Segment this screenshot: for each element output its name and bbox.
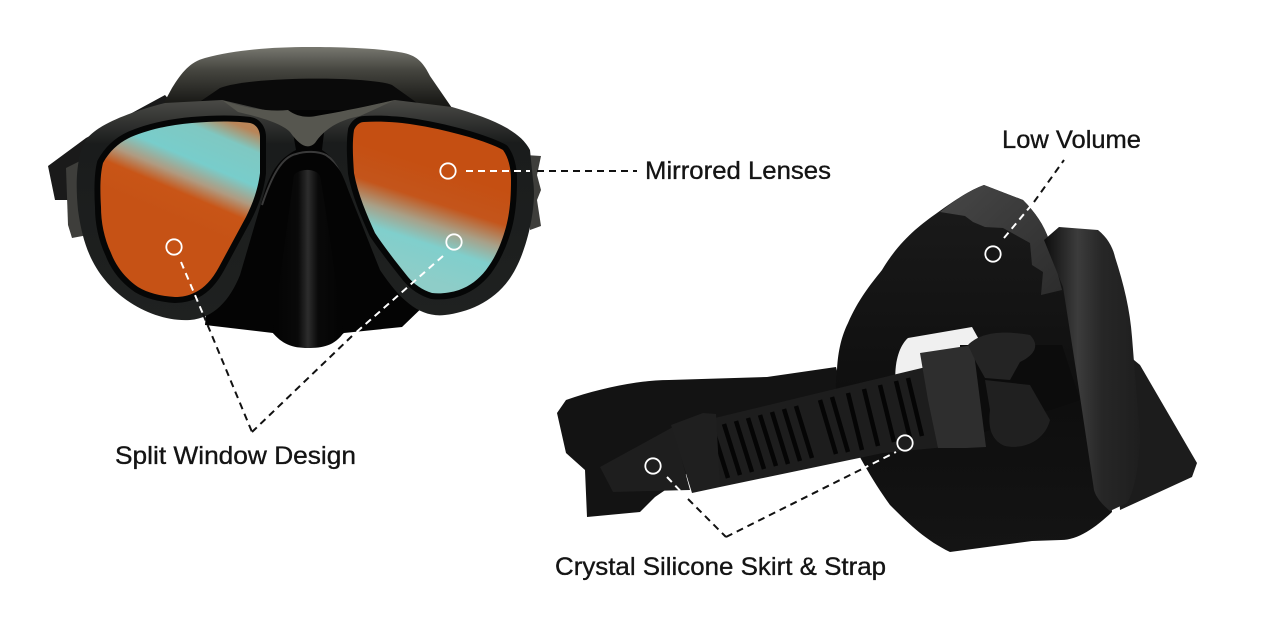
rear lens cover — [1110, 340, 1197, 510]
left frame — [77, 100, 296, 320]
leader black part — [1034, 160, 1064, 202]
leader white part — [1004, 202, 1034, 238]
callout: crystal silicone skirt and strap — [555, 435, 913, 581]
right leader black part — [726, 469, 862, 537]
right frame — [322, 100, 534, 315]
central black body — [205, 110, 430, 345]
left marker — [166, 239, 182, 255]
right marker — [446, 234, 462, 250]
callout: split window design — [115, 234, 462, 470]
buckle body — [920, 345, 986, 448]
ribbed strap — [694, 367, 946, 487]
right leader black part — [252, 336, 352, 432]
marker — [985, 246, 1001, 262]
skirt highlight — [940, 185, 1062, 295]
label: Split Window Design — [115, 442, 356, 470]
left marker — [645, 458, 661, 474]
label: Low Volume — [1002, 126, 1141, 154]
label: Crystal Silicone Skirt & Strap — [555, 553, 886, 581]
keeper loop — [671, 413, 720, 493]
right buckle — [525, 155, 541, 230]
callout: mirrored lenses — [440, 157, 831, 185]
marker — [440, 163, 456, 179]
upper cam — [968, 333, 1035, 380]
top recess — [195, 79, 420, 125]
strap mount — [960, 345, 1080, 440]
left leader black part — [203, 314, 252, 432]
label: Mirrored Lenses — [645, 157, 831, 185]
callout: low volume — [985, 126, 1141, 262]
leader black part — [537, 170, 637, 172]
right leader white part — [352, 256, 443, 336]
right leader white part — [862, 452, 896, 469]
top box of mask — [160, 47, 452, 125]
front view mask — [48, 47, 541, 348]
leader white part — [466, 170, 530, 172]
left leader white part — [667, 477, 688, 499]
bridge — [222, 100, 395, 146]
strap lobe — [600, 427, 690, 492]
right marker — [897, 435, 913, 451]
nose arch highlight — [262, 152, 360, 205]
silicone skirt — [836, 185, 1112, 552]
back strap of front view — [48, 95, 172, 200]
side view mask — [557, 185, 1197, 552]
left leader black part — [688, 499, 726, 537]
left leader white part — [181, 262, 203, 314]
left lens — [100, 122, 260, 297]
rear strap band — [557, 367, 850, 517]
left buckle — [66, 160, 88, 238]
reflection — [895, 327, 982, 388]
nose pocket — [272, 170, 344, 348]
mask frame rim — [1044, 227, 1140, 511]
right lens — [353, 122, 511, 293]
lower cam — [985, 380, 1050, 447]
strap ribs — [712, 378, 922, 478]
